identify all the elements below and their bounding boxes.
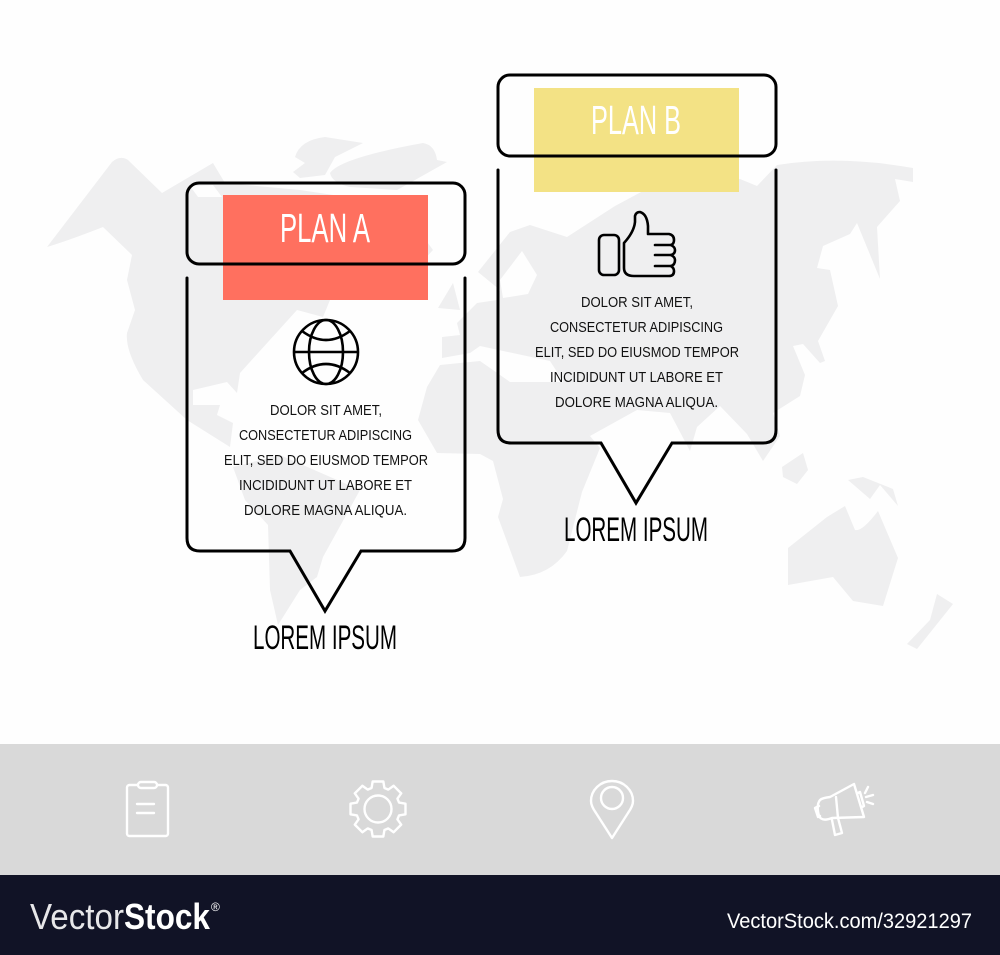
plan B body text: DOLORE MAGNA ALIQUA. [555, 395, 718, 411]
plan B body text: CONSECTETUR ADIPISCING [550, 320, 723, 336]
plan B body text: ELIT, SED DO EIUSMOD TEMPOR [535, 345, 739, 361]
plan B header frame [498, 75, 776, 156]
plan B heading: PLAN B [591, 97, 681, 143]
plan A body text [224, 403, 428, 519]
plan B colour block [534, 88, 739, 192]
plan A body text: INCIDIDUNT UT LABORE ET [239, 478, 412, 494]
icon: thumbs up [599, 212, 675, 276]
icon: globe [294, 320, 358, 384]
footer image id: VectorStock.com/32921297 [727, 910, 972, 933]
plan B body text: DOLOR SIT AMET, [581, 295, 693, 311]
footer logo: Stock [124, 896, 211, 937]
plan A header frame [187, 183, 465, 264]
plan A body text: CONSECTETUR ADIPISCING [239, 428, 412, 444]
panel: plan B [498, 75, 776, 549]
plan B label: LOREM IPSUM [564, 511, 708, 549]
footer logo [30, 896, 220, 937]
plan A body text: DOLORE MAGNA ALIQUA. [244, 503, 407, 519]
footer bar [0, 875, 1000, 955]
plan A body text: ELIT, SED DO EIUSMOD TEMPOR [224, 453, 428, 469]
plan B body text [535, 295, 739, 411]
icon: clipboard [127, 782, 168, 836]
plan A colour block [223, 195, 428, 300]
icon: megaphone [815, 784, 873, 835]
footer logo: Vector [30, 896, 124, 937]
plan A callout outline [187, 278, 465, 611]
world map background [47, 137, 953, 649]
plan A label: LOREM IPSUM [253, 619, 397, 657]
panel: plan A [187, 183, 465, 657]
plan A heading: PLAN A [280, 205, 370, 251]
icon: gear [351, 782, 405, 836]
footer logo: ® [211, 900, 220, 914]
icon: map pin [591, 781, 633, 838]
plan A body text: DOLOR SIT AMET, [270, 403, 382, 419]
plan B callout outline [498, 170, 776, 503]
grey icon band [0, 744, 1000, 875]
plan B body text: INCIDIDUNT UT LABORE ET [550, 370, 723, 386]
